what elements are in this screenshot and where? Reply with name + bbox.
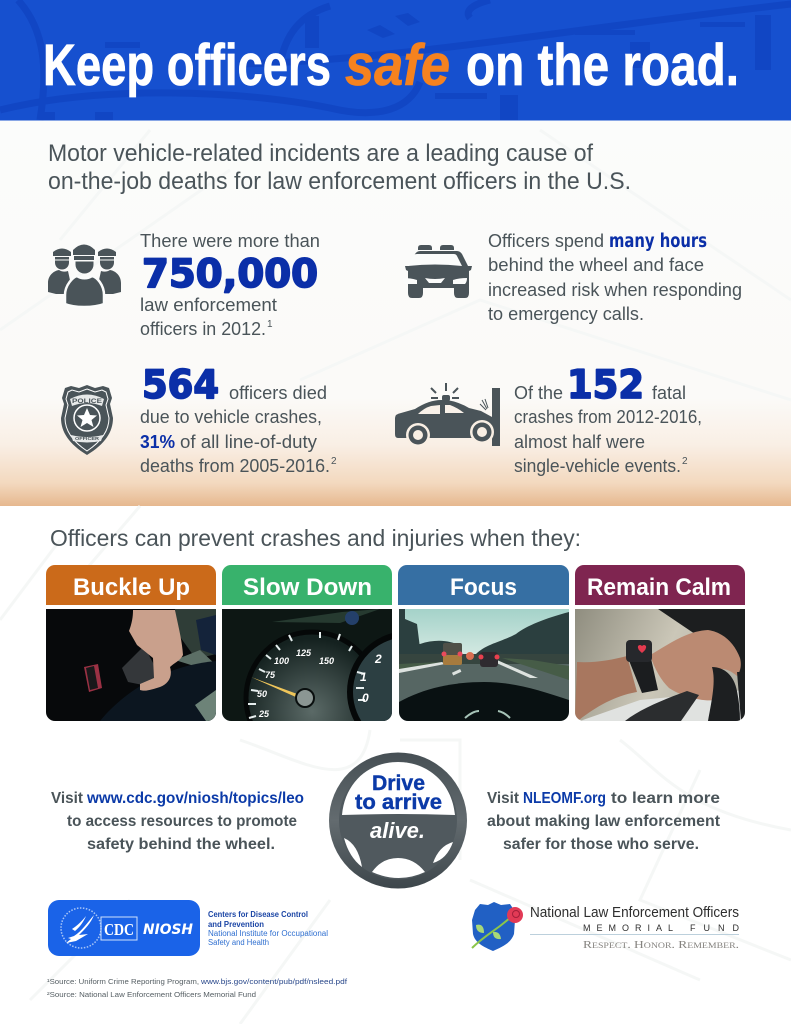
icon: police badge: POLICE <box>72 399 102 405</box>
stat: 564 officers died: 31% <box>140 431 175 452</box>
panel: focus: Focus <box>450 574 517 601</box>
footnotes: www.bjs.gov/content/pub/pdf/nsleed.pdf <box>200 977 348 986</box>
CDC NIOSH logo: NIOSH <box>143 922 193 938</box>
CDC agency name: Centers for Disease Control <box>208 910 308 919</box>
footnotes <box>47 977 348 999</box>
icon: steering wheel badge: alive. <box>370 818 425 843</box>
stat: 564 officers died: of all line-of-duty <box>180 431 318 452</box>
NLEOMF wordmark: National Law Enforcement Officers <box>530 905 739 921</box>
CDC agency name: Safety and Health <box>208 938 269 947</box>
panel: slow down: 100 <box>274 656 289 666</box>
CDC NIOSH logo: CDC <box>104 920 134 939</box>
panel: slow down: 150 <box>319 656 334 666</box>
title: safe <box>345 33 450 98</box>
title: Keep officers <box>43 33 331 98</box>
icon: police badge <box>61 385 113 455</box>
CDC agency name: National Institute for Occupational <box>208 929 328 938</box>
NLEOMF call to action: Visit <box>487 790 520 807</box>
stat: 750,000 officers: law enforcement <box>140 294 277 315</box>
CDC call to action <box>51 790 304 853</box>
stat: 564 officers died <box>140 363 337 476</box>
stat: 152 fatal crashes: Of the <box>514 382 563 403</box>
intro text: Motor vehicle-related incidents are a leading cause of <box>48 140 593 167</box>
CDC agency name <box>208 910 328 947</box>
panel: slow down: 2 <box>374 652 382 666</box>
stat: many hours: behind the wheel and face <box>488 254 704 275</box>
stat: 152 fatal crashes: 152 <box>567 363 644 408</box>
CDC NIOSH logo <box>48 900 200 956</box>
CDC call to action: Visit <box>51 790 84 807</box>
stat: 750,000 officers: 750,000 <box>142 252 318 297</box>
icon: steering wheel badge: to arrive <box>355 791 442 814</box>
panel: slow down: 125 <box>296 648 312 658</box>
title <box>43 33 739 98</box>
CDC agency name: and Prevention <box>208 920 264 929</box>
section heading: Officers can prevent crashes and injuries when they: <box>50 525 581 551</box>
stat: 152 fatal crashes <box>514 363 702 476</box>
footnotes: ¹Source: Uniform Crime Reporting Program, <box>47 977 199 986</box>
stat: 564 officers died: 564 <box>142 363 219 408</box>
icon: three officers <box>48 244 121 307</box>
panel: slow down: 0 <box>362 691 369 705</box>
NLEOMF call to action: to learn more <box>611 790 720 807</box>
stat: 152 fatal crashes: 2 <box>682 456 688 467</box>
icon: police car crashing into wall <box>395 383 500 447</box>
NLEOMF wordmark: FUND <box>690 923 740 933</box>
CDC call to action: to access resources to promote <box>67 813 297 830</box>
panel: slow down <box>222 565 392 721</box>
stat: 750,000 officers <box>140 230 320 339</box>
icon: steering wheel badge: Drive <box>372 772 425 795</box>
footnotes: ²Source: National Law Enforcement Officers Memorial Fund <box>47 990 256 999</box>
stat: 152 fatal crashes: almost half were <box>514 431 645 452</box>
panel: remain calm <box>575 565 745 721</box>
panel: slow down: 50 <box>257 689 267 699</box>
stat: many hours: many hours <box>609 231 707 252</box>
stat: many hours: to emergency calls. <box>488 303 644 324</box>
stat: 152 fatal crashes: single-vehicle events. <box>514 455 681 476</box>
CDC call to action: www.cdc.gov/niosh/topics/leo <box>86 790 304 807</box>
title: on the road. <box>466 33 739 98</box>
panel: remain calm: Remain Calm <box>587 574 731 601</box>
stat: many hours <box>488 230 742 324</box>
NLEOMF call to action: about making law enforcement <box>487 813 721 830</box>
panel: slow down: 25 <box>258 709 270 719</box>
title banner <box>0 0 791 120</box>
NLEOMF call to action <box>487 790 721 853</box>
stat: 564 officers died: due to vehicle crashes, <box>140 406 322 427</box>
NLEOMF wordmark <box>530 905 740 951</box>
stat: 750,000 officers: officers in 2012. <box>140 318 266 339</box>
panel: slow down: Slow Down <box>243 574 372 601</box>
stat: 750,000 officers: 1 <box>267 319 273 330</box>
CDC call to action: safety behind the wheel. <box>87 836 275 853</box>
stat: many hours: Officers spend <box>488 230 604 251</box>
stat: 750,000 officers: There were more than <box>140 230 320 251</box>
NLEOMF logo <box>472 902 523 951</box>
intro text <box>48 140 631 195</box>
icon: police car front <box>403 245 472 298</box>
icon: steering wheel badge <box>329 752 467 888</box>
stat: many hours: increased risk when responding <box>488 279 742 300</box>
panel: focus <box>398 565 569 721</box>
stat: 152 fatal crashes: fatal <box>652 382 686 403</box>
NLEOMF call to action: safer for those who serve. <box>503 836 699 853</box>
stat: 564 officers died: 2 <box>331 456 337 467</box>
icon: police badge: OFFICER <box>75 436 100 441</box>
panel: buckle up <box>46 565 216 721</box>
stat: 152 fatal crashes: crashes from 2012-2016, <box>514 406 702 427</box>
NLEOMF call to action: NLEOMF.org <box>523 790 606 807</box>
panel: slow down: 1 <box>360 670 367 684</box>
panel: slow down: 75 <box>265 670 276 680</box>
NLEOMF wordmark: MEMORIAL <box>583 923 673 933</box>
stat: 564 officers died: deaths from 2005-2016. <box>140 455 330 476</box>
intro text: on-the-job deaths for law enforcement officers in the U.S. <box>48 168 631 195</box>
panel: buckle up: Buckle Up <box>73 574 190 601</box>
stat: 564 officers died: officers died <box>229 382 327 403</box>
NLEOMF wordmark: Respect. Honor. Remember. <box>583 939 739 951</box>
